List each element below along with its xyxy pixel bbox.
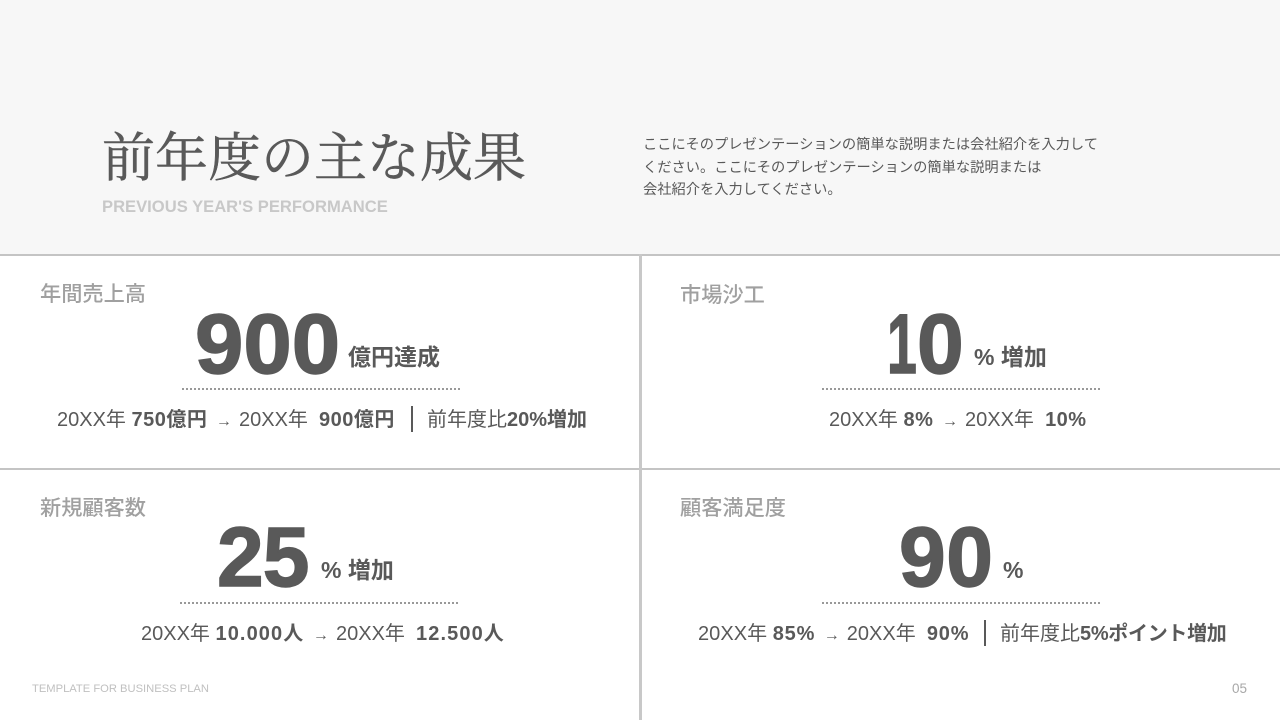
description: ここにそのプレゼンテーションの簡単な説明または会社紹介を入力して <box>643 137 1098 153</box>
detail: 20XX年 750億円 20XX年 900億円 <box>57 409 395 431</box>
big number: 25 <box>217 510 308 604</box>
separator <box>411 406 413 432</box>
panel: customer satisfaction <box>680 491 1227 646</box>
comparison: 前年度比20%増加 <box>427 409 587 431</box>
description <box>643 136 1098 198</box>
big number: 1 <box>887 297 917 391</box>
big number: 0 <box>917 297 964 391</box>
unit: % 増加 <box>321 557 394 583</box>
detail: 20XX年 10.000人 20XX年 12.500人 <box>141 623 505 645</box>
grid lines <box>0 254 1280 256</box>
dotted rule <box>182 388 460 390</box>
detail: → <box>313 627 329 644</box>
panel: new customers <box>40 491 505 645</box>
comparison: 前年度比5%ポイント増加 <box>1000 623 1227 645</box>
big number <box>887 297 964 391</box>
label: 年間売上高 <box>40 277 146 308</box>
unit: % 増加 <box>974 344 1047 370</box>
detail: → <box>942 413 958 430</box>
dotted rule <box>822 388 1100 390</box>
header band <box>0 0 1280 254</box>
panel: market share <box>680 278 1100 431</box>
page number: 05 <box>1232 681 1247 696</box>
big number: 90 <box>899 510 993 604</box>
subtitle: PREVIOUS YEAR'S PERFORMANCE <box>102 197 388 216</box>
label: 新規顧客数 <box>40 491 146 522</box>
big number: 900 <box>195 297 340 391</box>
description: ください。ここにそのプレゼンテーションの簡単な説明または <box>643 160 1041 176</box>
detail: → <box>824 627 840 644</box>
footer text: TEMPLATE FOR BUSINESS PLAN <box>32 683 209 695</box>
detail: 20XX年 85% 20XX年 90% <box>698 623 969 645</box>
dotted rule <box>822 602 1100 604</box>
unit: % <box>1003 557 1023 583</box>
detail: → <box>216 413 232 430</box>
detail: 20XX年 8% 20XX年 10% <box>829 409 1087 431</box>
panel: annual sales <box>40 277 587 432</box>
unit: 億円達成 <box>348 344 440 370</box>
title: 前年度の主な成果 <box>102 130 526 188</box>
label: 顧客満足度 <box>680 491 786 522</box>
description: 会社紹介を入力してください。 <box>643 182 842 198</box>
label: 市場沙工 <box>680 278 765 309</box>
separator <box>984 620 986 646</box>
dotted rule <box>180 602 458 604</box>
